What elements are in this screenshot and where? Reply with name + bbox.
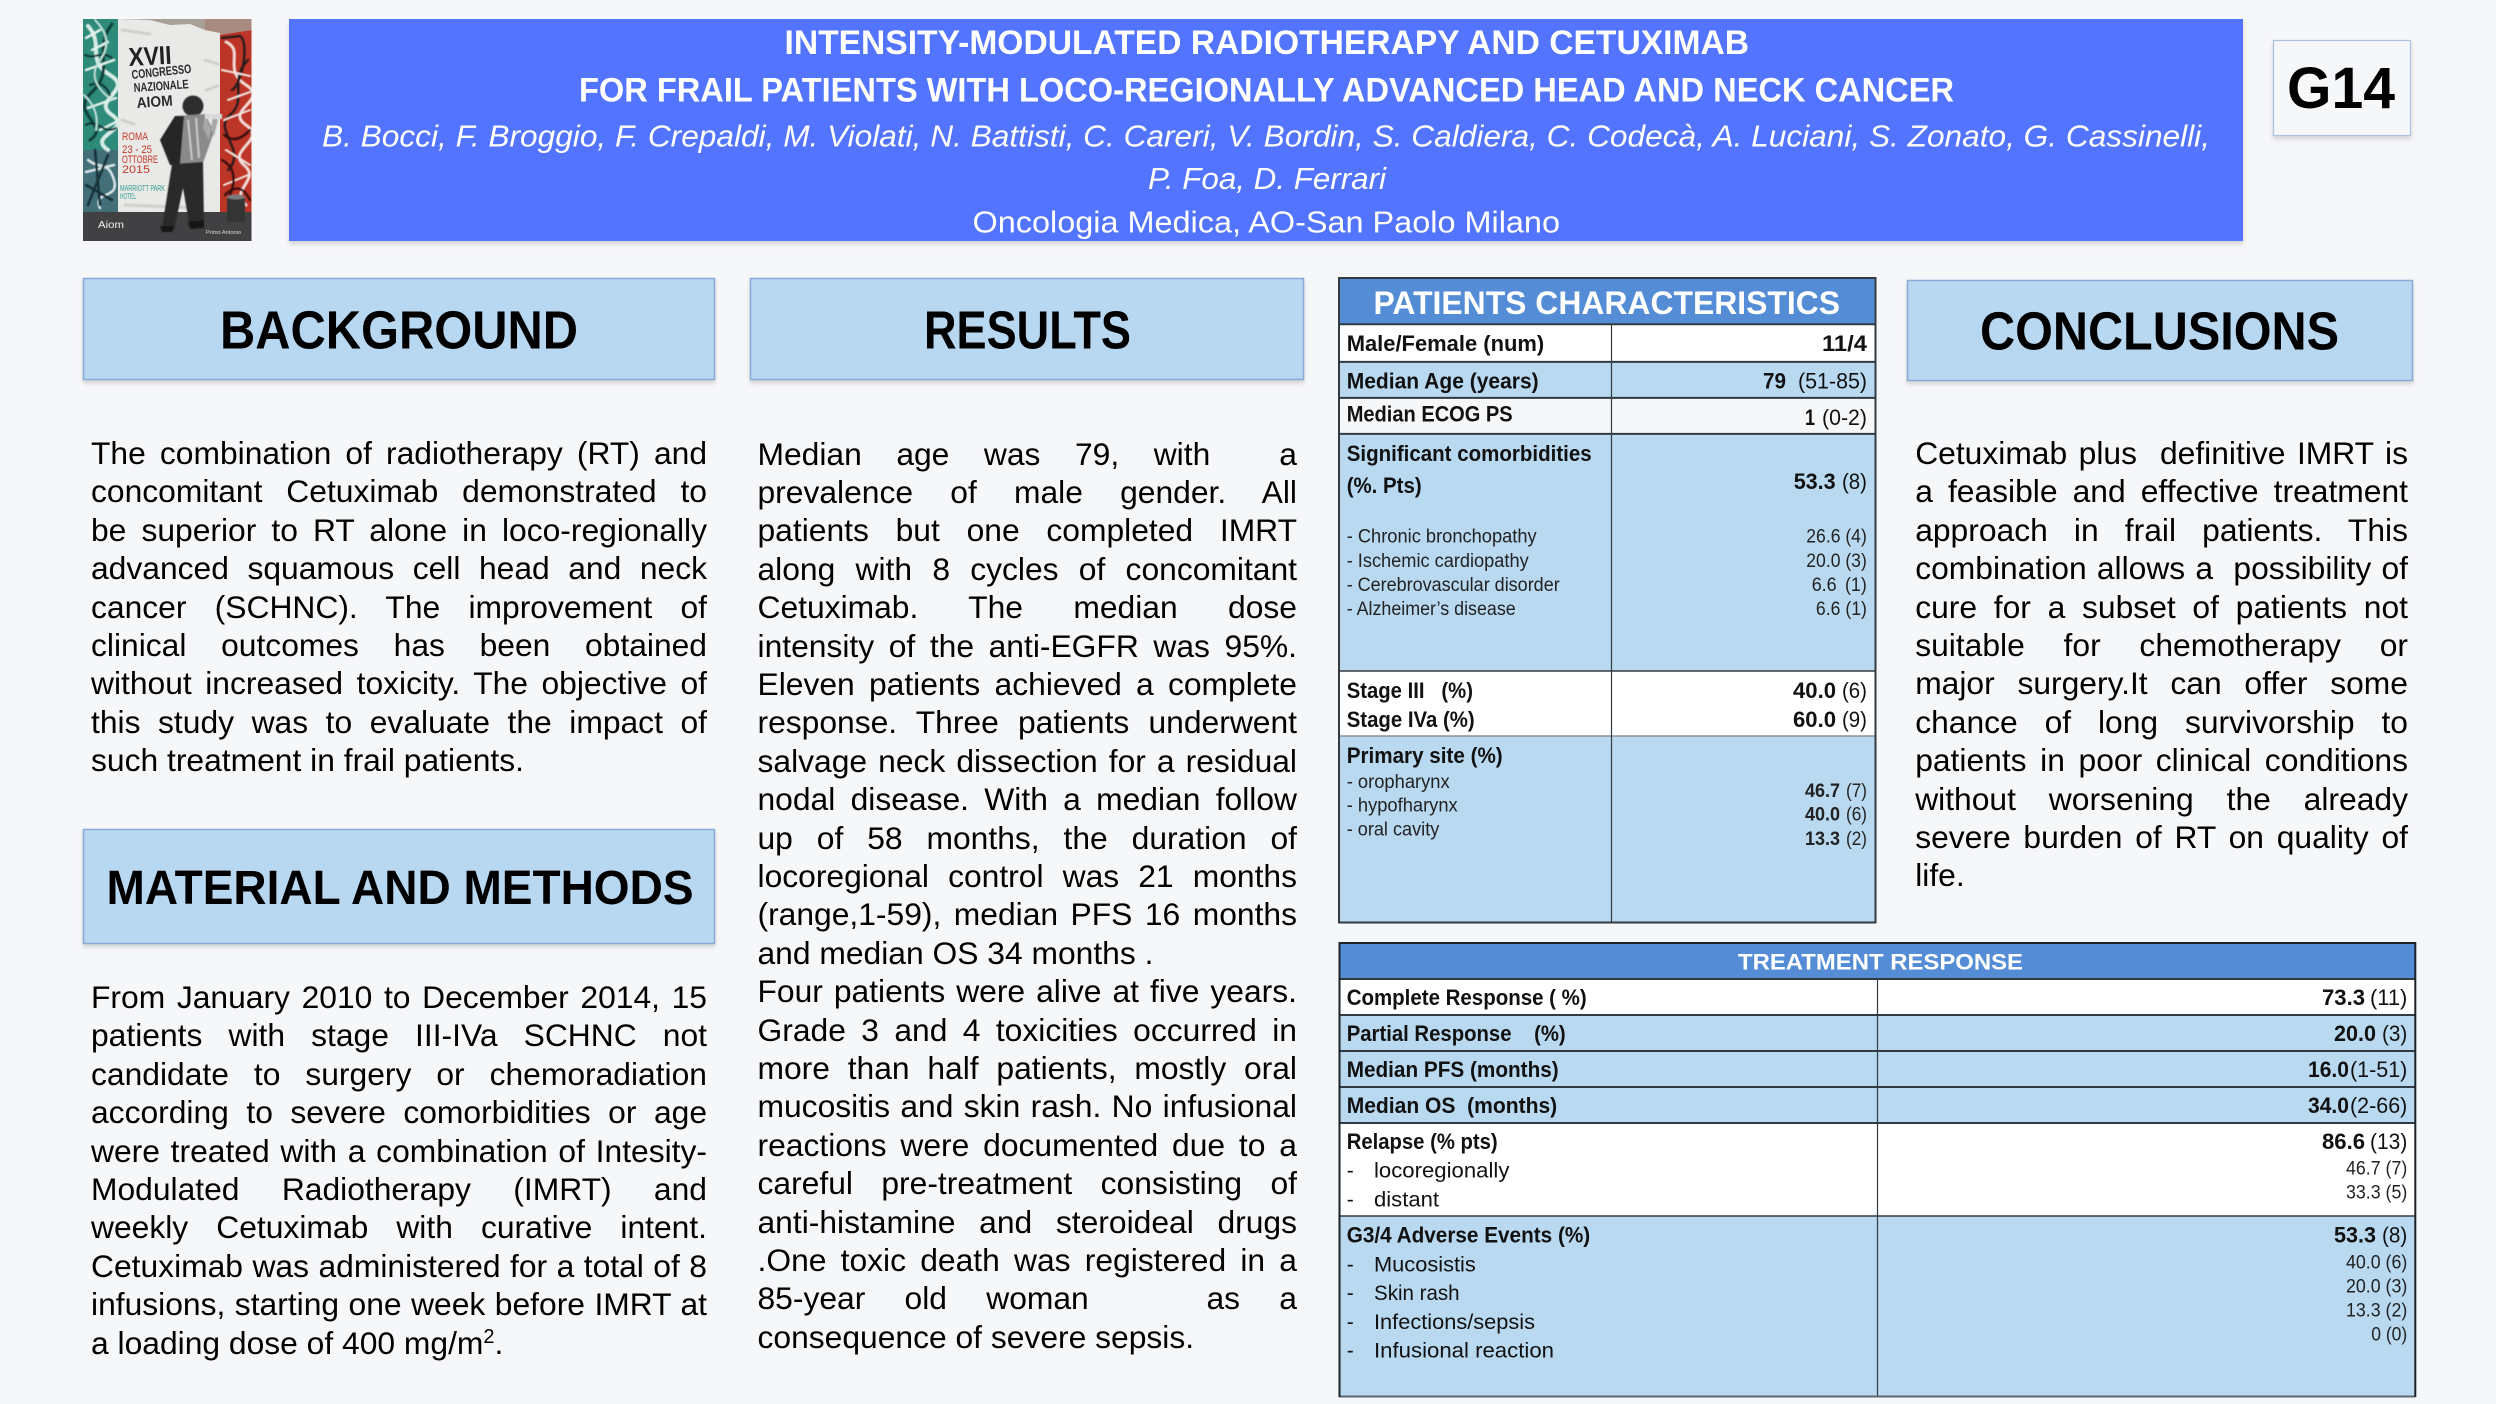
row: comorbidities bbox=[1347, 441, 1867, 620]
row: adverse events: Mucosistis bbox=[1374, 1253, 1476, 1276]
row: relapse: (13) bbox=[2370, 1129, 2407, 1154]
text block: material and methods: Modulated Radiotherapy (IMRT) and bbox=[91, 1171, 707, 1207]
text block: results: 85-year old woman as a bbox=[758, 1280, 1297, 1316]
poster lettering: 2015 bbox=[122, 164, 150, 176]
row: relapse bbox=[1347, 1129, 2407, 1212]
text block: results: along with 8 cycles of concomitant bbox=[758, 551, 1297, 587]
text block: background: advanced squamous cell head and neck bbox=[91, 550, 707, 586]
row: median OS: 34.0 bbox=[2308, 1093, 2349, 1118]
row: age: (51-85) bbox=[1798, 368, 1867, 393]
row: median OS: Median OS (months) bbox=[1347, 1093, 1557, 1118]
row: comorbidities: (1) bbox=[1845, 575, 1867, 596]
text block: conclusions: approach in frail patients. This bbox=[1915, 512, 2408, 548]
poster lettering: OTTOBRE bbox=[122, 154, 158, 166]
text block: material and methods: weekly Cetuximab with curative intent. bbox=[91, 1209, 707, 1245]
text block: results: Median age was 79, with a bbox=[758, 436, 1297, 472]
row: comorbidities: - Cerebrovascular disorder bbox=[1347, 575, 1560, 596]
poster lettering: ROMA bbox=[122, 131, 149, 143]
row: comorbidities: 53.3 bbox=[1794, 469, 1836, 494]
text block: conclusions: chance of long survivorship to bbox=[1915, 704, 2408, 740]
row: adverse events: Infusional reaction bbox=[1374, 1340, 1554, 1363]
poster lettering bbox=[98, 40, 241, 236]
text block: conclusions: combination allows a possibility of bbox=[1915, 550, 2408, 586]
text block: results: patients but one completed IMRT bbox=[758, 512, 1297, 548]
row: primary site: 40.0 bbox=[1805, 805, 1840, 826]
row: ECOG: Median ECOG PS bbox=[1347, 401, 1513, 426]
row: primary site: 13.3 bbox=[1805, 829, 1840, 850]
text block: conclusions: a feasible and effective treatment bbox=[1915, 473, 2408, 509]
text block: conclusions: life. bbox=[1915, 857, 1965, 893]
row: sex: Male/Female (num) bbox=[1347, 331, 1544, 356]
text block: material and methods: a loading dose of 400 mg/m2. bbox=[91, 1325, 503, 1361]
row: primary site: - oral cavity bbox=[1347, 820, 1440, 840]
text block: background: The combination of radiotherapy (RT) and bbox=[91, 435, 707, 471]
poster lettering: AIOM bbox=[136, 93, 173, 112]
row: partial response: 20.0 bbox=[2334, 1021, 2376, 1046]
row: complete response: Complete Response ( %) bbox=[1347, 985, 1587, 1010]
poster code box bbox=[2274, 40, 2410, 136]
row: relapse: 86.6 bbox=[2322, 1129, 2365, 1154]
row: comorbidities: (%. Pts) bbox=[1347, 473, 1422, 498]
text block: results: Eleven patients achieved a complete bbox=[758, 666, 1297, 702]
row: primary site: Primary site (%) bbox=[1347, 743, 1503, 768]
text block: material and methods: patients with stage III-IVa SCHNC not bbox=[91, 1017, 707, 1053]
row: adverse events bbox=[1347, 1223, 2407, 1363]
row: ECOG: 1 bbox=[1805, 405, 1815, 430]
row: comorbidities: - Alzheimer’s disease bbox=[1347, 599, 1516, 620]
text block: results: reactions were documented due to a bbox=[758, 1127, 1297, 1163]
text block: conclusions: major surgery.It can offer some bbox=[1915, 665, 2408, 701]
row: comorbidities: 20.0 (3) bbox=[1806, 551, 1867, 572]
text block: material and methods: were treated with a combination of Intesity- bbox=[91, 1133, 707, 1169]
table: treatment response bbox=[1339, 942, 2416, 1397]
row: relapse: - bbox=[1347, 1189, 1354, 1212]
row: adverse events: - bbox=[1347, 1340, 1354, 1363]
text block: results: Cetuximab. The median dose bbox=[758, 589, 1297, 625]
row: relapse: distant bbox=[1374, 1189, 1439, 1212]
text block: background bbox=[91, 435, 707, 778]
row: primary site: - oropharynx bbox=[1347, 772, 1450, 793]
text block: material and methods: according to severe comorbidities or age bbox=[91, 1094, 707, 1130]
row: ECOG: (0-2) bbox=[1822, 405, 1867, 430]
text block: material and methods: candidate to surgery or chemoradiation bbox=[91, 1056, 707, 1092]
painter figure bbox=[160, 96, 245, 232]
authors line 1: B. Bocci, F. Broggio, F. Crepaldi, M. Violati, N. Battisti, C. Careri, V. Bordin, S. Caldiera, C. Codecà, A. Luciani, S. Zonato, G. Cassinelli, bbox=[322, 118, 2210, 154]
table title: TREATMENT RESPONSE bbox=[1738, 949, 2023, 974]
poster lettering: XVII bbox=[128, 40, 172, 72]
row: primary site: - hypofharynx bbox=[1347, 796, 1458, 817]
row: primary site bbox=[1347, 743, 1867, 850]
text block: results: and median OS 34 months . bbox=[758, 935, 1153, 971]
poster lettering: CONGRESSO bbox=[131, 62, 192, 82]
poster lettering: MARRIOTT PARK bbox=[120, 184, 165, 193]
congress poster image bbox=[83, 19, 253, 241]
row: ECOG bbox=[1347, 401, 1867, 430]
row: stage: (9) bbox=[1842, 707, 1867, 732]
row: sex: 11/4 bbox=[1822, 331, 1868, 356]
text block: conclusions: severe burden of RT on quality of bbox=[1915, 819, 2408, 855]
text block: results: locoregional control was 21 months bbox=[758, 858, 1297, 894]
heading: material and methods bbox=[84, 830, 714, 944]
row: adverse events: 13.3 (2) bbox=[2346, 1300, 2407, 1321]
row: median PFS bbox=[1347, 1057, 2407, 1082]
row: adverse events: - bbox=[1347, 1282, 1354, 1305]
row: comorbidities: 6.6 (1) bbox=[1816, 599, 1867, 620]
row: complete response: (11) bbox=[2370, 985, 2407, 1010]
text block: results: consequence of severe sepsis. bbox=[758, 1319, 1194, 1355]
text block: results: (range,1-59), median PFS 16 months bbox=[758, 896, 1297, 932]
text block: results: prevalence of male gender. All bbox=[758, 474, 1297, 510]
text block: results bbox=[758, 436, 1297, 1355]
text block: conclusions: cure for a subset of patients not bbox=[1915, 589, 2408, 625]
affiliation: Oncologia Medica, AO-San Paolo Milano bbox=[972, 204, 1560, 240]
text block: results: .One toxic death was registered in a bbox=[758, 1242, 1297, 1278]
heading: background bbox=[84, 278, 714, 380]
row: stage: Stage III (%) bbox=[1347, 678, 1473, 703]
text block: results: nodal disease. With a median follow bbox=[758, 781, 1297, 817]
row: partial response: Partial Response (%) bbox=[1347, 1021, 1566, 1046]
row: adverse events: Infections/sepsis bbox=[1374, 1311, 1535, 1334]
text block: background: such treatment in frail patients. bbox=[91, 742, 524, 778]
table: patients characteristics bbox=[1338, 278, 1876, 922]
table title: PATIENTS CHARACTERISTICS bbox=[1374, 285, 1840, 321]
text block: results: more than half patients, mostly oral bbox=[758, 1050, 1297, 1086]
poster lettering: NAZIONALE bbox=[133, 77, 189, 95]
row: stage: 40.0 bbox=[1793, 678, 1836, 703]
row: comorbidities: 6.6 bbox=[1812, 575, 1837, 596]
text block: background: clinical outcomes has been obtained bbox=[91, 627, 707, 663]
row: age: Median Age (years) bbox=[1347, 368, 1539, 393]
row: comorbidities: Significant comorbidities bbox=[1347, 441, 1592, 466]
text block: background: this study was to evaluate the impact of bbox=[91, 704, 707, 740]
text block: conclusions: without worsening the already bbox=[1915, 781, 2408, 817]
row: comorbidities: - Chronic bronchopathy bbox=[1347, 527, 1537, 548]
text block: results: intensity of the anti-EGFR was 95%. bbox=[758, 628, 1297, 664]
row: partial response: (3) bbox=[2382, 1021, 2407, 1046]
row: comorbidities: - Ischemic cardiopathy bbox=[1347, 551, 1529, 572]
poster lettering: Aiom bbox=[98, 220, 124, 231]
poster lettering: HOTEL bbox=[120, 192, 136, 201]
row: relapse: 33.3 (5) bbox=[2346, 1182, 2407, 1203]
heading: material and methods: MATERIAL AND METHODS bbox=[106, 862, 694, 915]
text block: material and methods: From January 2010 to December 2014, 15 bbox=[91, 979, 707, 1015]
row: adverse events: 20.0 (3) bbox=[2346, 1276, 2407, 1297]
text block: results: mucositis and skin rash. No infusional bbox=[758, 1088, 1297, 1124]
row: relapse: locoregionally bbox=[1374, 1160, 1510, 1183]
text block: background: without increased toxicity. The objective of bbox=[91, 665, 707, 701]
row: adverse events: G3/4 Adverse Events (%) bbox=[1347, 1223, 1590, 1248]
row: complete response: 73.3 bbox=[2322, 985, 2365, 1010]
row: adverse events: 53.3 bbox=[2334, 1223, 2376, 1248]
row: median PFS: 16.0 bbox=[2308, 1057, 2349, 1082]
row: adverse events: 40.0 (6) bbox=[2346, 1252, 2407, 1273]
text block: background: concomitant Cetuximab demonstrated to bbox=[91, 473, 707, 509]
text block: results: anti-histamine and steroideal drugs bbox=[758, 1204, 1297, 1240]
row: comorbidities: (8) bbox=[1842, 469, 1867, 494]
row: relapse: Relapse (% pts) bbox=[1347, 1129, 1498, 1154]
poster code box: G14 bbox=[2287, 56, 2395, 121]
heading: conclusions bbox=[1908, 280, 2412, 380]
title line 1: INTENSITY-MODULATED RADIOTHERAPY AND CETUXIMAB bbox=[784, 24, 1749, 62]
poster lettering: 23 - 25 bbox=[122, 144, 152, 156]
text block: results: response. Three patients underwent bbox=[758, 704, 1297, 740]
text block: background: be superior to RT alone in loco-regionally bbox=[91, 512, 707, 548]
title line 2: FOR FRAIL PATIENTS WITH LOCO-REGIONALLY ADVANCED HEAD AND NECK CANCER bbox=[579, 72, 1954, 110]
text block: conclusions: Cetuximab plus definitive IMRT is bbox=[1915, 435, 2408, 471]
row: primary site: (2) bbox=[1846, 829, 1867, 850]
row: relapse: 46.7 (7) bbox=[2346, 1158, 2407, 1179]
row: stage: Stage IVa (%) bbox=[1347, 707, 1475, 732]
heading: background: BACKGROUND bbox=[220, 300, 578, 360]
row: adverse events: - bbox=[1347, 1311, 1354, 1334]
text block: results: Four patients were alive at five years. bbox=[758, 973, 1297, 1009]
row: primary site: (7) bbox=[1846, 781, 1867, 802]
row: primary site: 46.7 bbox=[1805, 781, 1840, 802]
text block: background: cancer (SCHNC). The improvement of bbox=[91, 589, 707, 625]
row: stage bbox=[1347, 678, 1867, 732]
text block: results: careful pre-treatment consisting of bbox=[758, 1165, 1297, 1201]
row: median PFS: Median PFS (months) bbox=[1347, 1057, 1559, 1082]
text block: material and methods: Cetuximab was administered for a total of 8 bbox=[91, 1248, 707, 1284]
row: stage: 60.0 bbox=[1793, 707, 1836, 732]
row: stage: (6) bbox=[1842, 678, 1867, 703]
title banner bbox=[289, 19, 2243, 241]
row: age: 79 bbox=[1763, 368, 1786, 393]
row: adverse events: - bbox=[1347, 1253, 1354, 1276]
row: adverse events: 0 (0) bbox=[2371, 1324, 2407, 1345]
row: comorbidities: 26.6 (4) bbox=[1806, 527, 1867, 548]
row: partial response bbox=[1347, 1021, 2407, 1046]
text block: material and methods bbox=[91, 979, 707, 1361]
text block: results: Grade 3 and 4 toxicities occurred in bbox=[758, 1012, 1297, 1048]
row: age bbox=[1347, 368, 1867, 393]
poster lettering: Primo Antonio bbox=[206, 230, 241, 236]
heading: results bbox=[750, 278, 1304, 380]
heading: conclusions: CONCLUSIONS bbox=[1980, 302, 2339, 362]
text block: conclusions: suitable for chemotherapy or bbox=[1915, 627, 2408, 663]
row: median OS: (2-66) bbox=[2350, 1093, 2407, 1118]
text block: conclusions: patients in poor clinical conditions bbox=[1915, 742, 2408, 778]
text block: results: salvage neck dissection for a residual bbox=[758, 743, 1297, 779]
text block: material and methods: infusions, starting one week before IMRT at bbox=[91, 1286, 707, 1322]
authors line 2: P. Foa, D. Ferrari bbox=[1148, 161, 1387, 196]
text block: results: up of 58 months, the duration of bbox=[758, 820, 1297, 856]
row: adverse events: (8) bbox=[2382, 1223, 2407, 1248]
row: primary site: (6) bbox=[1846, 805, 1867, 826]
text block: conclusions bbox=[1915, 435, 2408, 893]
row: adverse events: Skin rash bbox=[1374, 1282, 1460, 1305]
row: median OS bbox=[1347, 1093, 2407, 1118]
row: median PFS: (1-51) bbox=[2350, 1057, 2407, 1082]
heading: results: RESULTS bbox=[924, 300, 1131, 360]
row: complete response bbox=[1347, 985, 2407, 1010]
row: sex bbox=[1347, 331, 1868, 356]
row: relapse: - bbox=[1347, 1160, 1354, 1183]
